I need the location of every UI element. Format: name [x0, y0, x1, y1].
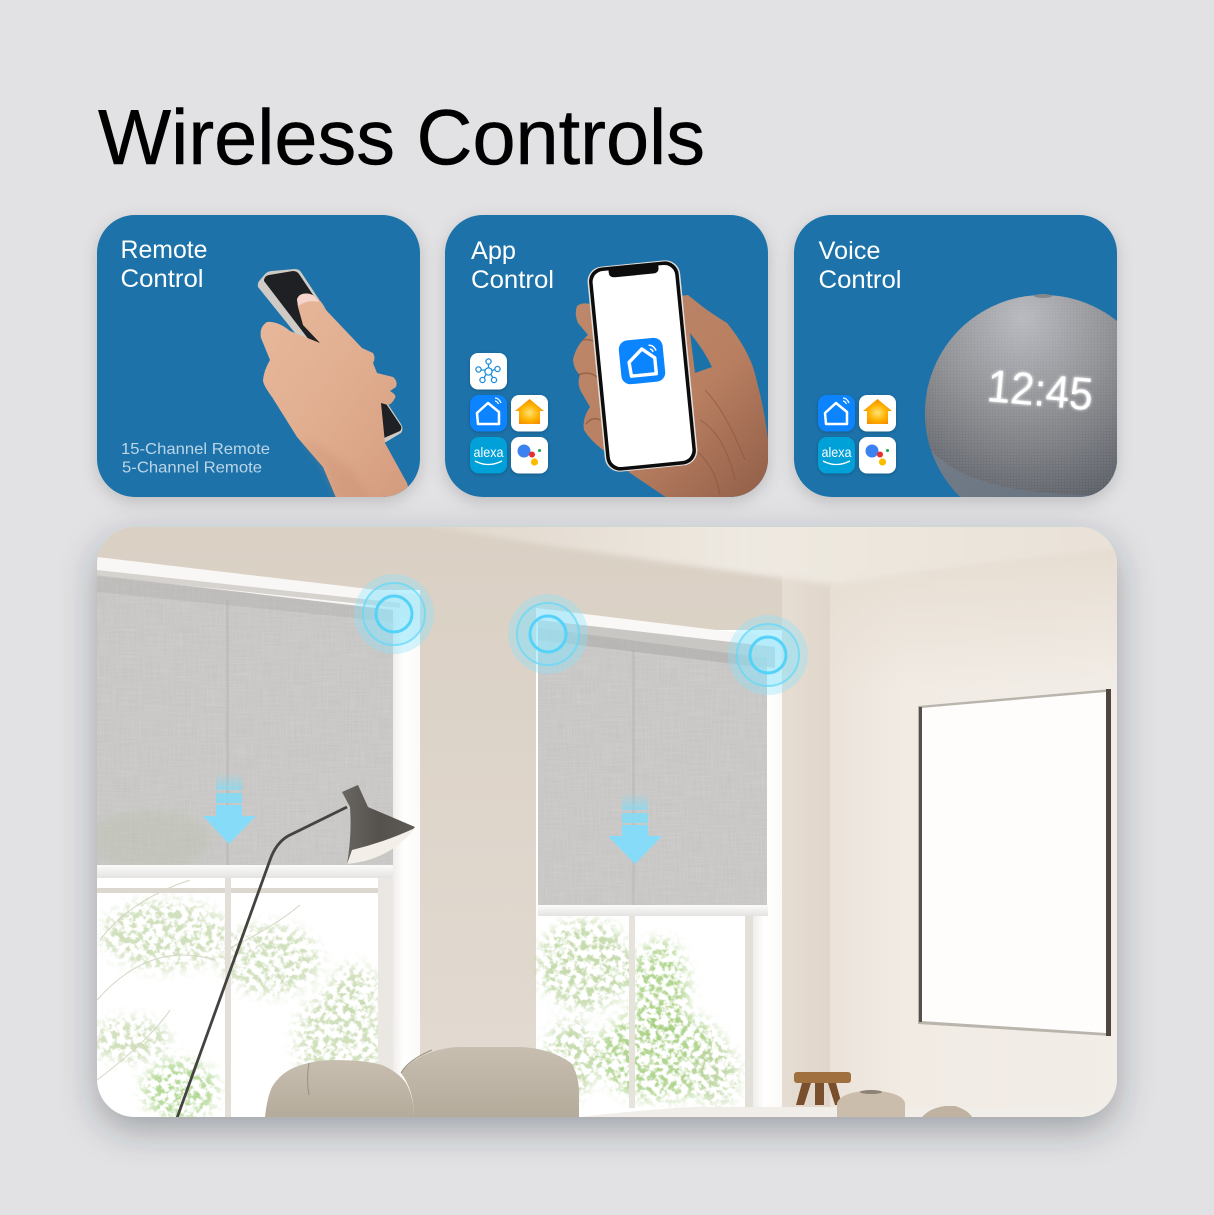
panel: app control: [445, 215, 772, 500]
arrow: right shade down: [608, 793, 662, 864]
app icon on phone: [618, 337, 666, 385]
icon: apple home: [511, 395, 548, 432]
card background: [445, 215, 768, 497]
panel: room scene: [90, 520, 1125, 1125]
remote models list: [121, 441, 270, 476]
heading: app control: App: [471, 237, 516, 265]
heading: remote control: Remote: [120, 236, 208, 264]
sofa: [265, 1047, 579, 1117]
clock display: 12:45: [985, 360, 1095, 420]
icon: smart life: [818, 395, 855, 432]
wooden stool: [794, 1072, 851, 1105]
icon: alexa: alexa: [474, 444, 504, 460]
sideboard top: [581, 1107, 837, 1117]
panel: remote control: [97, 215, 420, 500]
signal pulse: left motor: [354, 574, 434, 654]
icon: alexa: [470, 437, 507, 474]
small pot: [922, 1106, 972, 1117]
icon: google assistant: [511, 437, 548, 474]
heading: voice control: Voice: [818, 237, 880, 265]
wall picture frame: [918, 689, 1111, 1036]
left window foliage: [90, 900, 385, 1120]
title: Wireless Controls: [98, 93, 705, 181]
remote models list: 15-Channel Remote: [121, 441, 270, 458]
remote models list: 5-Channel Remote: [122, 460, 262, 476]
floor lamp: [177, 785, 415, 1118]
icon: apple home: [859, 395, 896, 432]
illustration: hand holding phone: [573, 259, 772, 500]
icon: alexa: [818, 437, 855, 474]
walls and ceiling: [97, 520, 1125, 1125]
icon: network hub: [470, 353, 507, 390]
left window: [90, 557, 420, 1120]
right window: [536, 608, 782, 1117]
ceramic vase: [837, 1090, 905, 1117]
card background: [794, 215, 1117, 497]
panel: voice control: [794, 215, 1125, 503]
card background: [97, 215, 420, 497]
heading: voice control: [818, 237, 902, 294]
room illustration: [90, 520, 1125, 1125]
heading: app control: [471, 237, 554, 294]
illustration: smart speaker: [925, 294, 1117, 497]
left roller shade: [90, 575, 393, 878]
signal pulse: right motor: [728, 615, 808, 695]
signal pulse: middle motor: [508, 594, 588, 674]
icon: alexa: alexa: [822, 444, 852, 460]
heading: remote control: Control: [120, 265, 204, 293]
illustration: hand holding remote: [258, 269, 412, 500]
heading: app control: Control: [471, 266, 554, 294]
heading: voice control: Control: [818, 266, 902, 294]
icon: smart life: [470, 395, 507, 432]
right window foliage: [537, 920, 740, 1105]
icon: google assistant: [859, 437, 896, 474]
heading: remote control: [120, 236, 208, 293]
hand: [573, 295, 772, 500]
panel shadow: [97, 527, 1117, 1117]
right roller shade: [538, 628, 768, 916]
smartphone: [586, 259, 699, 473]
arrow: left shade down: [203, 773, 256, 844]
